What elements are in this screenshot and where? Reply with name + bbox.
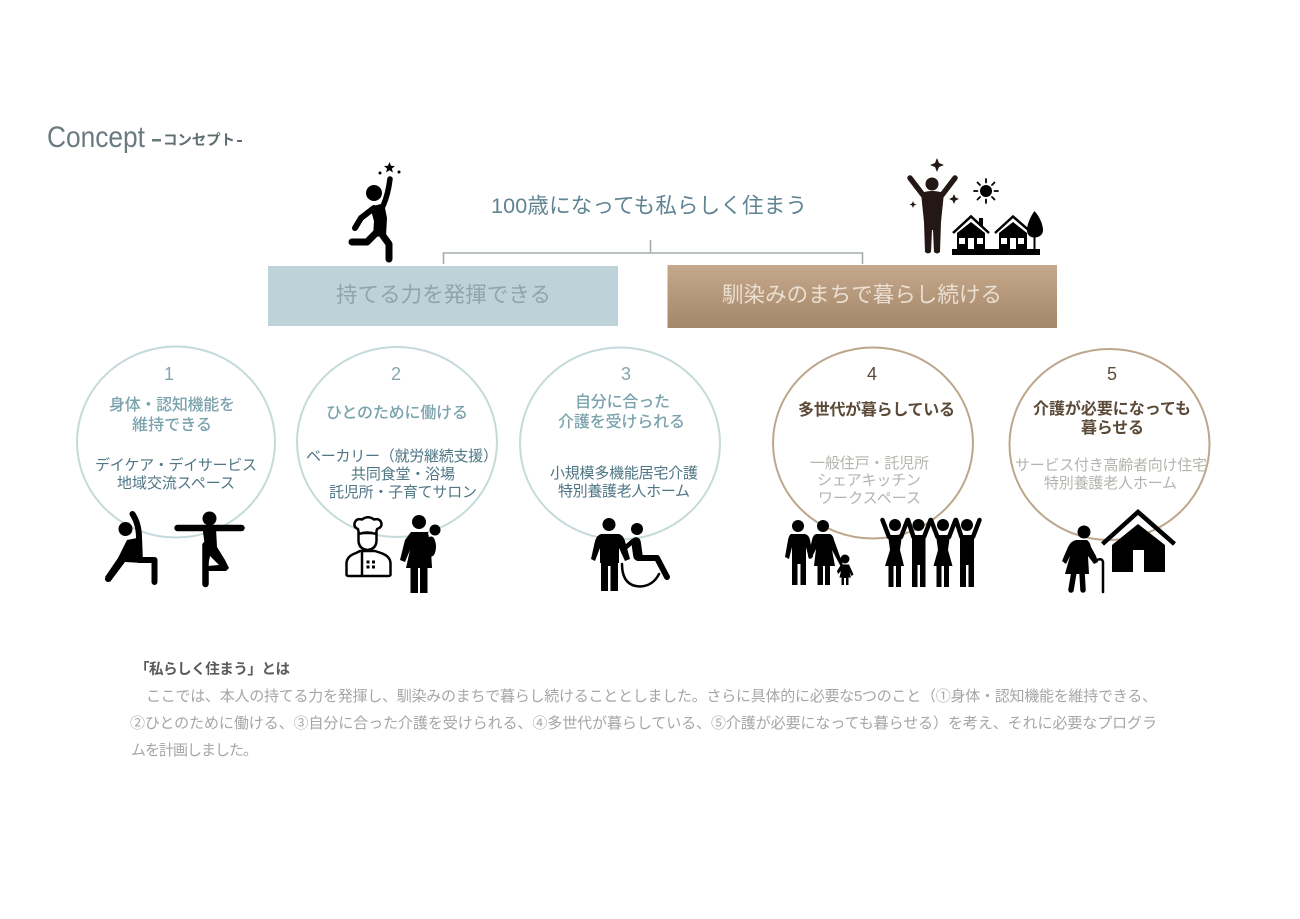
panel: circle 1: 身体・認知機能を bbox=[109, 396, 235, 414]
panel: circle 3: 自分に合った bbox=[575, 393, 670, 411]
panel: circle 5: 暮らせる bbox=[1081, 418, 1144, 437]
panel: circle 2: 共同食堂・浴場 bbox=[351, 466, 455, 483]
icon: group with raised arms bbox=[882, 519, 980, 587]
panel: circle 5 bbox=[1010, 349, 1210, 540]
icon: family bbox=[785, 520, 854, 585]
panel: circle 1: 維持できる bbox=[132, 416, 212, 434]
panel: strength box: 持てる力を発揮できる bbox=[336, 283, 551, 307]
title bbox=[47, 121, 242, 154]
panel: circle 2: 託児所・子育てサロン bbox=[329, 484, 477, 501]
panel: circle 1: 地域交流スペース bbox=[117, 475, 235, 492]
panel: familiar town box bbox=[668, 265, 1057, 328]
text block: explanation: ②ひとのために働ける、③自分に合った介護を受けられる、④多世代が暮らしている、⑤介護が必要になっても暮らせる）を考え、それに必要なプログラ bbox=[130, 714, 1157, 732]
panel: circle 5: サービス付き高齢者向け住宅 bbox=[1015, 457, 1207, 474]
icon: house bbox=[1102, 512, 1174, 572]
panel: circle 3: 小規模多機能居宅介護 bbox=[550, 464, 698, 482]
panel: circle 3 bbox=[520, 348, 720, 540]
icon: mother with child bbox=[400, 515, 440, 593]
panel: circle 2: ひとのために働ける bbox=[326, 404, 468, 422]
panel: circle 3: 介護を受けられる bbox=[558, 412, 685, 431]
icon: lunge exercise bbox=[105, 514, 154, 582]
panel: circle 5: 介護が必要になっても bbox=[1033, 399, 1191, 418]
icon: jumping person reaching star bbox=[352, 162, 400, 259]
icon: person with wheelchair user bbox=[591, 518, 667, 591]
text block: explanation: 「私らしく住まう」とは bbox=[135, 660, 290, 678]
panel: circle 5: 5 bbox=[1107, 364, 1117, 384]
text block: explanation: ムを計画しました。 bbox=[131, 742, 258, 759]
main heading: 100歳になっても私らしく住まう bbox=[491, 194, 807, 218]
panel: circle 2: ベーカリー（就労継続支援） bbox=[306, 448, 498, 465]
panel: circle 4: 多世代が暮らしている bbox=[798, 400, 955, 419]
panel: familiar town box: 馴染みのまちで暮らし続ける bbox=[722, 283, 1002, 307]
panel: circle 2: 2 bbox=[391, 364, 401, 384]
icon: baker bbox=[346, 517, 390, 576]
panel: circle 4: 一般住戸・託児所 bbox=[810, 455, 929, 472]
panel: circle 3: 3 bbox=[621, 364, 631, 384]
text block: explanation: ここでは、本人の持てる力を発揮し、馴染みのまちで暮らし続けることとしました。さらに具体的に必要な5つのこと（①身体・認知機能を維持できる、 bbox=[146, 688, 1157, 705]
panel: circle 5: 特別養護老人ホーム bbox=[1044, 475, 1177, 492]
panel: circle 1: デイケア・デイサービス bbox=[95, 456, 257, 474]
panel: circle 4 bbox=[773, 348, 973, 538]
icon: tree pose exercise bbox=[178, 512, 242, 584]
panel: circle 4: ワークスペース bbox=[818, 490, 921, 507]
text block: explanation bbox=[130, 660, 1157, 759]
title: コンセプト bbox=[163, 132, 235, 149]
icon: elderly woman with cane bbox=[1062, 526, 1103, 592]
panel: circle 4: シェアキッチン bbox=[817, 472, 921, 489]
panel: circle 4: 4 bbox=[867, 364, 877, 384]
connector lines bbox=[444, 240, 862, 264]
panel: circle 3: 特別養護老人ホーム bbox=[558, 483, 690, 500]
title: Concept bbox=[47, 121, 146, 154]
panel: circle 2 bbox=[297, 347, 498, 537]
panel: strength box bbox=[268, 266, 618, 326]
icon: person with raised arms and houses bbox=[910, 158, 1043, 255]
panel: circle 1 bbox=[77, 346, 275, 538]
panel: circle 1: 1 bbox=[164, 364, 174, 384]
